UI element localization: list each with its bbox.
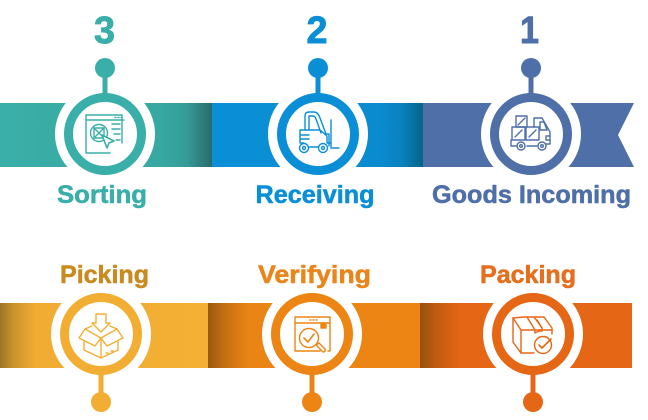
step 3: sorting (0, 10, 212, 167)
bottom bands (0, 303, 632, 368)
icon: forklift (300, 112, 339, 152)
node: receiving (268, 58, 368, 184)
band: verifying (208, 303, 420, 368)
node: picking (51, 284, 151, 412)
step 1: goods incoming (423, 10, 634, 167)
icon: window with magnifier check (295, 317, 330, 352)
label: Packing: Packing (480, 261, 576, 289)
label: Goods Incoming: Goods Incoming (432, 181, 631, 209)
label: Sorting: Sorting (57, 181, 147, 209)
label: Verifying: Verifying (258, 261, 371, 289)
icon: box with check (513, 317, 552, 354)
number 3: 3 (94, 10, 115, 52)
band: packing (420, 303, 632, 368)
label: Receiving: Receiving (256, 181, 374, 209)
node: verifying (262, 284, 362, 412)
band: sorting (0, 103, 212, 167)
band: receiving (212, 103, 423, 167)
node: goods incoming (481, 58, 581, 184)
band: picking (0, 303, 208, 368)
step 2: receiving (212, 10, 423, 167)
number 1: 1 (520, 10, 539, 52)
node: sorting (55, 58, 155, 184)
icon: window with cursor (86, 115, 124, 153)
band: goods incoming ribbon (423, 103, 634, 167)
icon: delivery truck with boxes (511, 116, 550, 150)
icon: open box with arrow (79, 314, 123, 358)
number 2: 2 (306, 10, 328, 52)
node: packing (483, 284, 583, 412)
label: Picking: Picking (60, 261, 149, 289)
